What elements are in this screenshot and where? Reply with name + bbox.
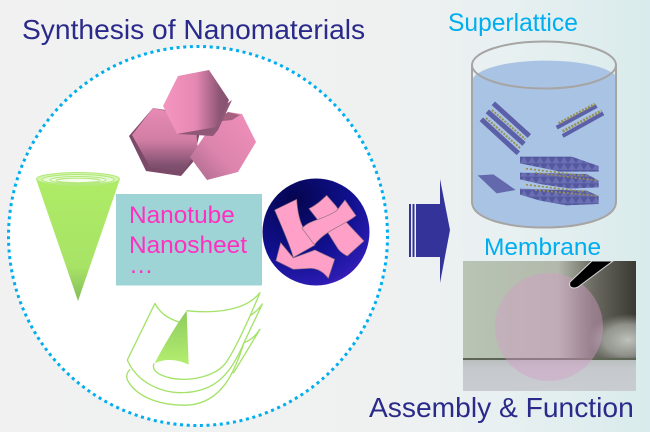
photo: membrane disc: [463, 261, 650, 391]
heading: Superlattice: Superlattice: [448, 10, 578, 37]
sheets: tilted stack right: [557, 104, 603, 136]
sheets: small flat sheet: [478, 174, 516, 193]
panel: synthesis circle with dotted blue border: [8, 46, 388, 426]
icon: three pink hexagonal crystals: [129, 70, 256, 180]
icon: green nanotube cone: [36, 172, 120, 301]
footer heading: Assembly & Function: Assembly & Function: [369, 391, 634, 423]
sheets: tilted stack left: [481, 103, 529, 153]
title: Synthesis of Nanomaterials: Synthesis of Nanomaterials: [22, 13, 365, 45]
sheets: large layered stack: [520, 157, 599, 205]
arrow: dark blue block arrow: [409, 179, 450, 283]
label: Nanotube: Nanotube: [129, 202, 235, 229]
icon: rolled green nanosheet stack: [127, 293, 262, 405]
text box: nanomaterial types: [116, 194, 262, 286]
icon: blue sphere with pink nanosheets: [262, 178, 370, 286]
icon: beaker with superlattice sheets: [472, 42, 617, 228]
heading: Membrane: Membrane: [484, 234, 601, 261]
pen tip: [570, 261, 613, 288]
label: ellipsis: …: [129, 252, 153, 279]
label: Nanosheet: Nanosheet: [129, 232, 247, 259]
